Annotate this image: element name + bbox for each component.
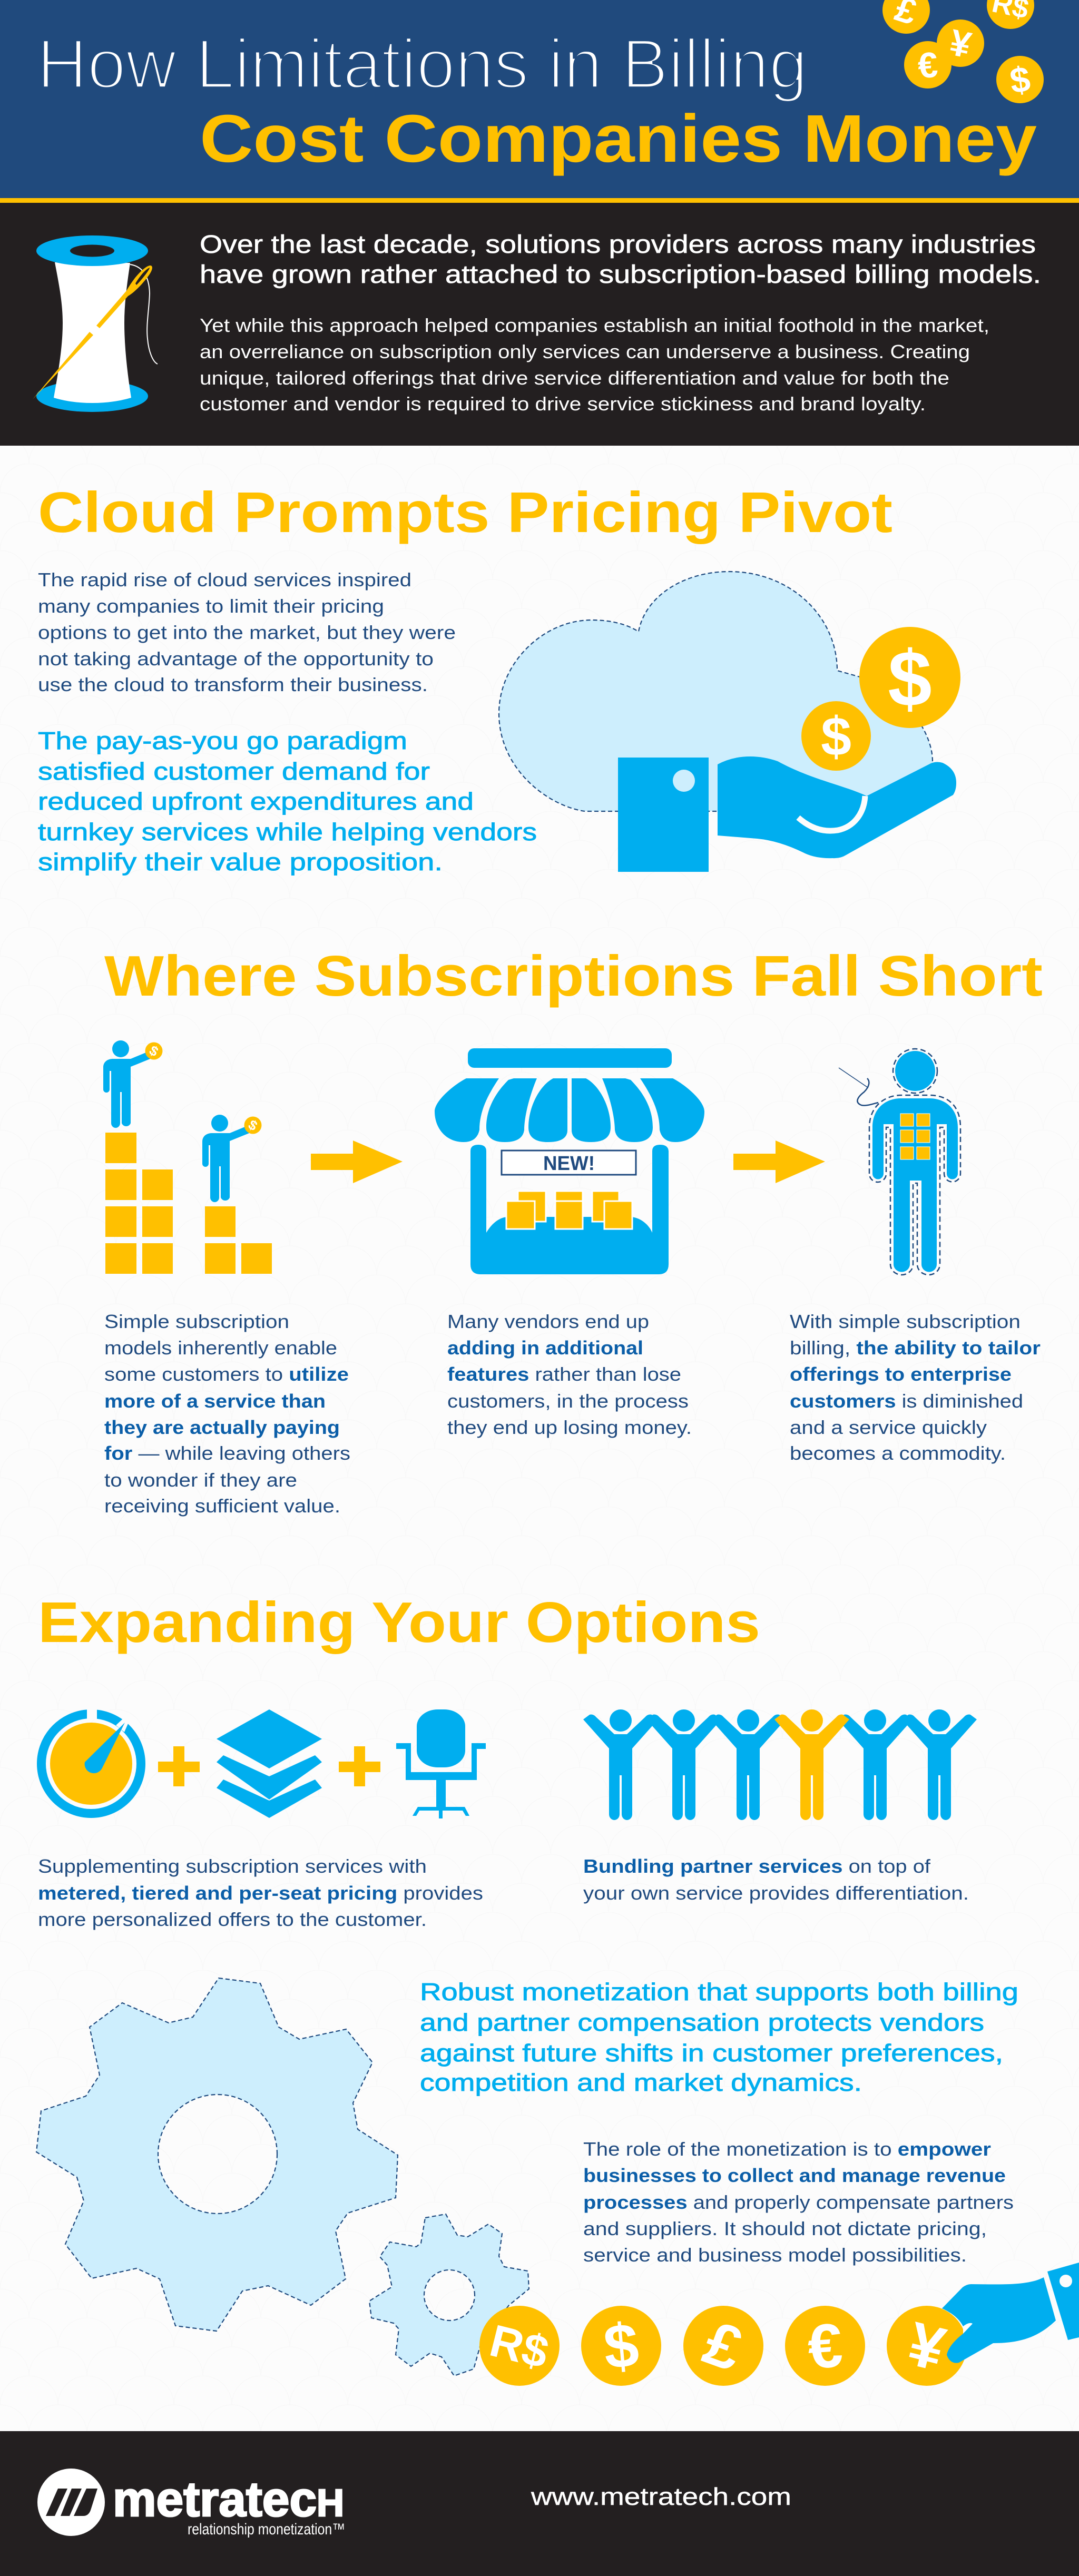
text: bundling: your own service provides differentiation. <box>583 1882 969 1904</box>
body text: service and business model possibilities. <box>583 2244 967 2266</box>
column text: commodity: With simple subscription <box>790 1311 1021 1332</box>
footer <box>0 2431 1079 2576</box>
merchandise boxes <box>506 1191 632 1229</box>
icon: falling currency coins: € <box>917 45 939 86</box>
text: pricing options <box>38 1855 483 1930</box>
intro body text: Yet while this approach helped companies establish an initial foothold in the market, <box>200 314 989 336</box>
icon: small gear <box>369 2214 529 2376</box>
callout text: competition and market dynamics. <box>420 2069 862 2096</box>
currency coins row: R$ <box>485 2315 553 2378</box>
currency coins row: ¥ <box>901 2309 952 2385</box>
person with coin, top of short stack <box>202 1115 261 1202</box>
panel: intro <box>0 203 1079 446</box>
icon: tiered layers <box>217 1709 322 1818</box>
callout text <box>38 727 537 876</box>
plus sign <box>339 1746 380 1786</box>
logo: relationship monetization™ <box>188 2521 345 2538</box>
icon: storefront <box>435 1048 704 1274</box>
column text: added features: adding in additional <box>447 1337 643 1359</box>
currency coins row <box>479 2306 967 2386</box>
sign: new: NEW! <box>543 1153 595 1175</box>
section: cloud prompts pricing pivot <box>38 480 960 876</box>
currency coins row: £ <box>695 2308 751 2385</box>
text: pricing options: metered, tiered and per-seat pricing provides <box>38 1882 483 1904</box>
header banner <box>0 0 1079 203</box>
intro body text: customer and vendor is required to drive service stickiness and brand loyalty. <box>200 393 926 415</box>
person with coin, top of tall stack <box>103 1040 162 1128</box>
section: where subscriptions fall short <box>103 944 1043 1517</box>
intro lead statement <box>200 231 1041 289</box>
icon: cloud with hand and coins: $ <box>821 706 851 768</box>
section: expanding your options <box>38 1590 977 1930</box>
arrow <box>733 1140 825 1183</box>
intro body text: unique, tailored offerings that drive service differentiation and value for both the <box>200 367 949 389</box>
callout text <box>420 1978 1018 2096</box>
body text <box>583 2138 1014 2266</box>
body text: The rapid rise of cloud services inspired <box>38 569 411 591</box>
icon: large gear <box>36 1978 398 2331</box>
icon: falling currency coins: $ <box>1007 59 1033 101</box>
column text: customers overuse: more of a service than <box>104 1390 326 1412</box>
logo: metratecH <box>113 2472 344 2526</box>
body text: processes and properly compensate partners <box>583 2191 1014 2213</box>
plus sign <box>158 1746 200 1786</box>
person with coin, top of short stack: $ <box>246 1116 260 1134</box>
column text: commodity: and a service quickly <box>790 1417 987 1438</box>
text: pricing options: Supplementing subscription services with <box>38 1855 427 1877</box>
callout text: reduced upfront expenditures and <box>38 788 474 815</box>
column text: added features <box>447 1311 692 1438</box>
page background <box>0 446 1079 2432</box>
column text: added features: Many vendors end up <box>447 1311 649 1332</box>
column text: added features: features rather than lose <box>447 1363 681 1385</box>
column text: commodity <box>790 1311 1041 1464</box>
column text: commodity: customers is diminished <box>790 1390 1023 1412</box>
column text: customers overuse: they are actually paying <box>104 1417 340 1438</box>
text: pricing options: more personalized offers to the customer. <box>38 1909 427 1930</box>
icon: thread spool and needle <box>33 235 158 412</box>
body text: many companies to limit their pricing <box>38 595 384 617</box>
logo <box>37 2469 345 2538</box>
column text: customers overuse <box>104 1311 350 1517</box>
text: bundling <box>583 1855 969 1904</box>
column text: customers overuse: for — while leaving others <box>104 1442 350 1464</box>
body text <box>38 569 456 695</box>
title line 1: How Limitations in Billing <box>37 25 808 103</box>
column text: commodity: offerings to enterprise <box>790 1363 1012 1385</box>
icon: metered gauge <box>41 1707 141 1813</box>
callout text: simplify their value proposition. <box>38 848 443 876</box>
column text: commodity: billing, the ability to tailor <box>790 1337 1041 1359</box>
icon: stitched person <box>839 1049 960 1275</box>
body text: and suppliers. It should not dictate pricing, <box>583 2218 987 2239</box>
icon: per-seat chair <box>396 1709 486 1818</box>
callout text: and partner compensation protects vendors <box>420 2009 984 2036</box>
body text: businesses to collect and manage revenue <box>583 2165 1006 2186</box>
icon: hand holding coin <box>942 2263 1079 2363</box>
body text: options to get into the market, but they were <box>38 622 456 643</box>
column text: customers overuse: models inherently enable <box>104 1337 337 1359</box>
heading: Where Subscriptions Fall Short <box>104 944 1043 1008</box>
currency coins row: $ <box>601 2310 642 2383</box>
column text: customers overuse: Simple subscription <box>104 1311 289 1332</box>
callout text: turnkey services while helping vendors <box>38 818 537 845</box>
person with coin, top of tall stack: $ <box>146 1042 161 1060</box>
callout text: satisfied customer demand for <box>38 758 430 785</box>
currency coins row: € <box>806 2310 845 2382</box>
column text: added features: they end up losing money. <box>447 1417 692 1438</box>
icon: partner team <box>583 1709 977 1820</box>
heading: Expanding Your Options <box>38 1590 760 1655</box>
icon: cloud with hand and coins <box>499 572 960 872</box>
icon: people on stacked boxes <box>103 1040 272 1274</box>
section: monetization <box>36 1978 1079 2386</box>
arrow <box>311 1140 403 1183</box>
text: bundling: Bundling partner services on top of <box>583 1855 931 1877</box>
website url: www.metratech.com <box>531 2483 791 2510</box>
body text: use the cloud to transform their business. <box>38 674 428 695</box>
body text: The role of the monetization is to empower <box>583 2138 991 2160</box>
title line 2: Cost Companies Money <box>200 101 1037 176</box>
icon: cloud with hand and coins: $ <box>888 634 932 723</box>
heading: Cloud Prompts Pricing Pivot <box>38 480 892 545</box>
intro body text: an overreliance on subscription only services can underserve a business. Creating <box>200 341 970 362</box>
column text: added features: customers, in the process <box>447 1390 689 1412</box>
sign: new <box>502 1151 636 1175</box>
column text: customers overuse: to wonder if they are <box>104 1469 297 1491</box>
column text: customers overuse: some customers to utilize <box>104 1363 349 1385</box>
column text: customers overuse: receiving sufficient value. <box>104 1495 340 1517</box>
callout text: The pay-as-you go paradigm <box>38 727 407 754</box>
intro body text <box>200 314 989 415</box>
icon: falling currency coins <box>882 0 1044 103</box>
callout text: Robust monetization that supports both billing <box>420 1978 1018 2005</box>
callout text: against future shifts in customer preferences, <box>420 2039 1003 2067</box>
body text: not taking advantage of the opportunity to <box>38 648 434 670</box>
intro lead statement: have grown rather attached to subscription-based billing models. <box>200 261 1041 289</box>
column text: commodity: becomes a commodity. <box>790 1442 1006 1464</box>
intro lead statement: Over the last decade, solutions providers across many industries <box>200 231 1036 259</box>
icon: falling currency coins: ¥ <box>946 22 975 66</box>
